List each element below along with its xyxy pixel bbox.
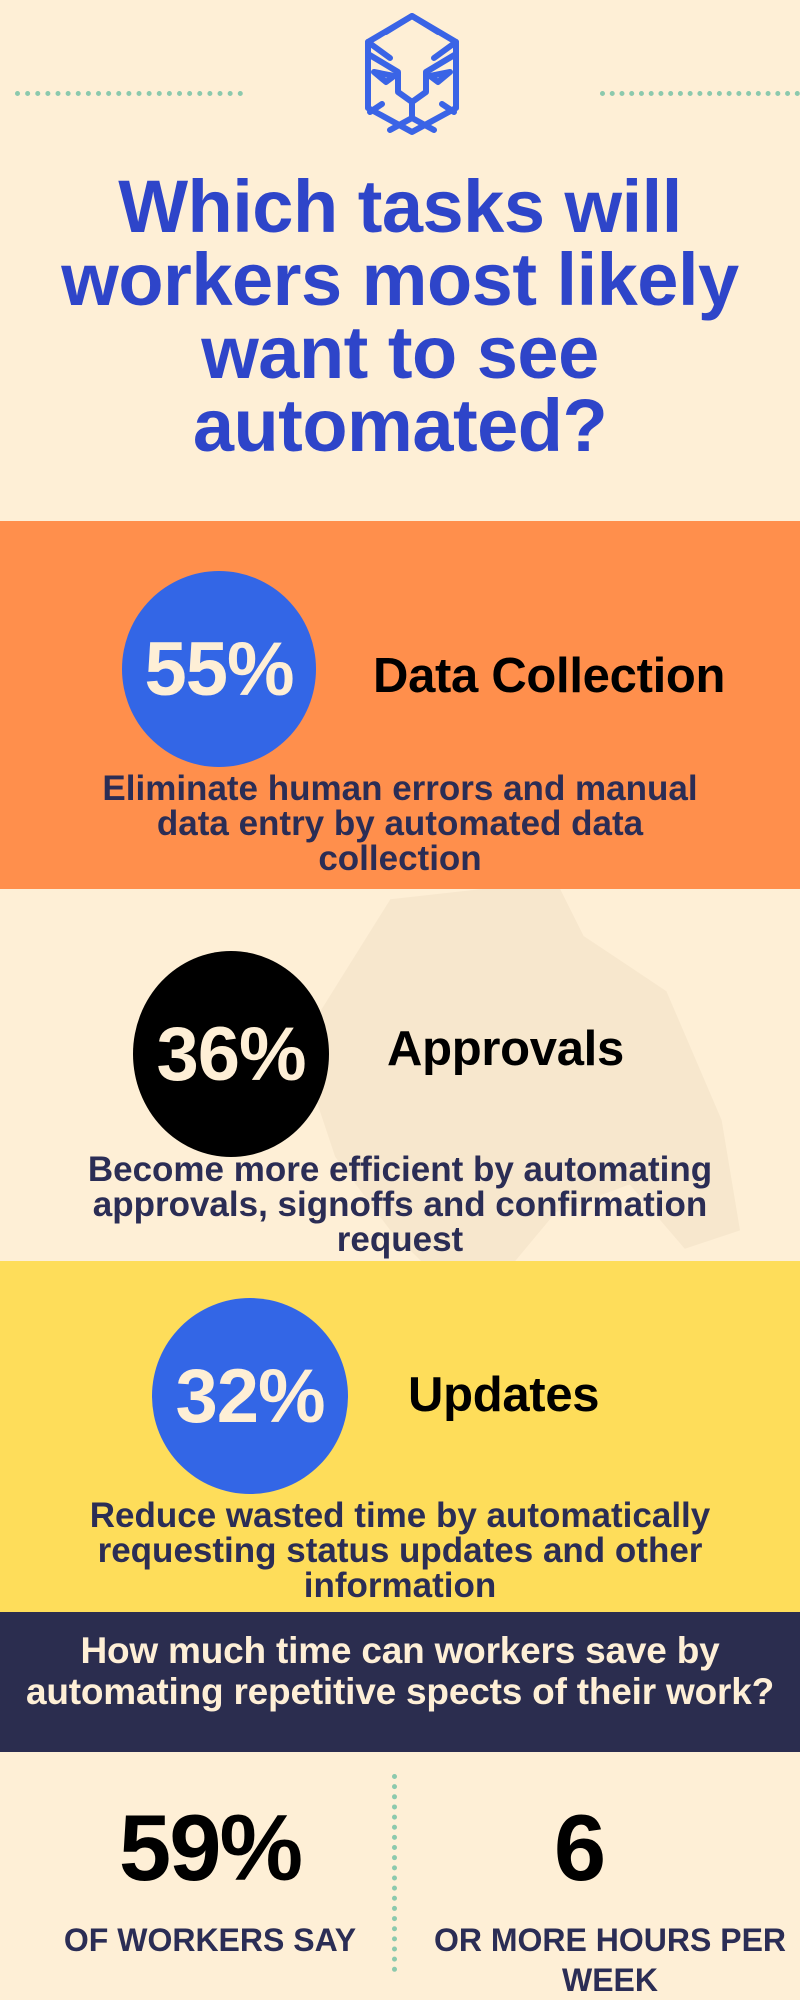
stat: 59%: 59% [119, 1795, 301, 1900]
text: data collection description [102, 769, 698, 878]
stat: 6 hours: OR MORE HOURS PER [434, 1922, 786, 1958]
text: data collection description: Eliminate human errors and manual [102, 769, 698, 808]
background map silhouette [318, 889, 740, 1261]
heading: Data Collection: Data Collection [373, 649, 725, 703]
text: approvals description [88, 1150, 712, 1259]
stat: 6 hours [434, 1795, 786, 1998]
stat: 6 hours: WEEK [562, 1962, 658, 1998]
title: automated? [193, 384, 607, 467]
text: approvals description: approvals, signoffs and confirmation [93, 1185, 707, 1224]
text: approvals description: request [337, 1220, 463, 1259]
circle: 55%: 55% [144, 626, 294, 712]
heading: Approvals: Approvals [387, 1022, 624, 1076]
heading: Updates: Updates [408, 1368, 599, 1422]
panel: approvals [88, 951, 712, 1259]
title: Which tasks will [118, 165, 682, 248]
title [61, 165, 739, 467]
stat: 59%: OF WORKERS SAY [64, 1922, 356, 1958]
text: data collection description: collection [318, 839, 482, 878]
text: updates description [90, 1496, 710, 1605]
text: updates description: information [304, 1566, 496, 1605]
panel: time saving question: automating repetitive spects of their work? [26, 1671, 774, 1712]
circle: 32%: 32% [175, 1354, 325, 1438]
circle: 55% [122, 571, 316, 767]
circle: 32% [152, 1298, 348, 1494]
stat: 6 hours: 6 [554, 1795, 606, 1900]
panel: time saving question: How much time can workers save by [80, 1630, 720, 1671]
text: updates description: requesting status updates and other [98, 1531, 702, 1570]
text: approvals description: Become more efficient by automating [88, 1150, 712, 1189]
decorative dotted line right [600, 91, 800, 96]
text: updates description: Reduce wasted time by automatically [90, 1496, 710, 1535]
stat: 59% [64, 1795, 356, 1958]
text: data collection description: data entry by automated data [157, 804, 643, 843]
circle: 36%: 36% [156, 1012, 306, 1096]
circle: 36% [133, 951, 329, 1157]
panel: time saving question [0, 1612, 800, 1752]
title: workers most likely [61, 238, 739, 321]
title: want to see [201, 311, 599, 394]
panel: updates [0, 1261, 800, 1612]
decorative dotted line left [15, 91, 243, 96]
panel: data collection [0, 521, 800, 889]
vertical dotted divider [392, 1774, 397, 1972]
icon: tiger logo [365, 13, 459, 135]
